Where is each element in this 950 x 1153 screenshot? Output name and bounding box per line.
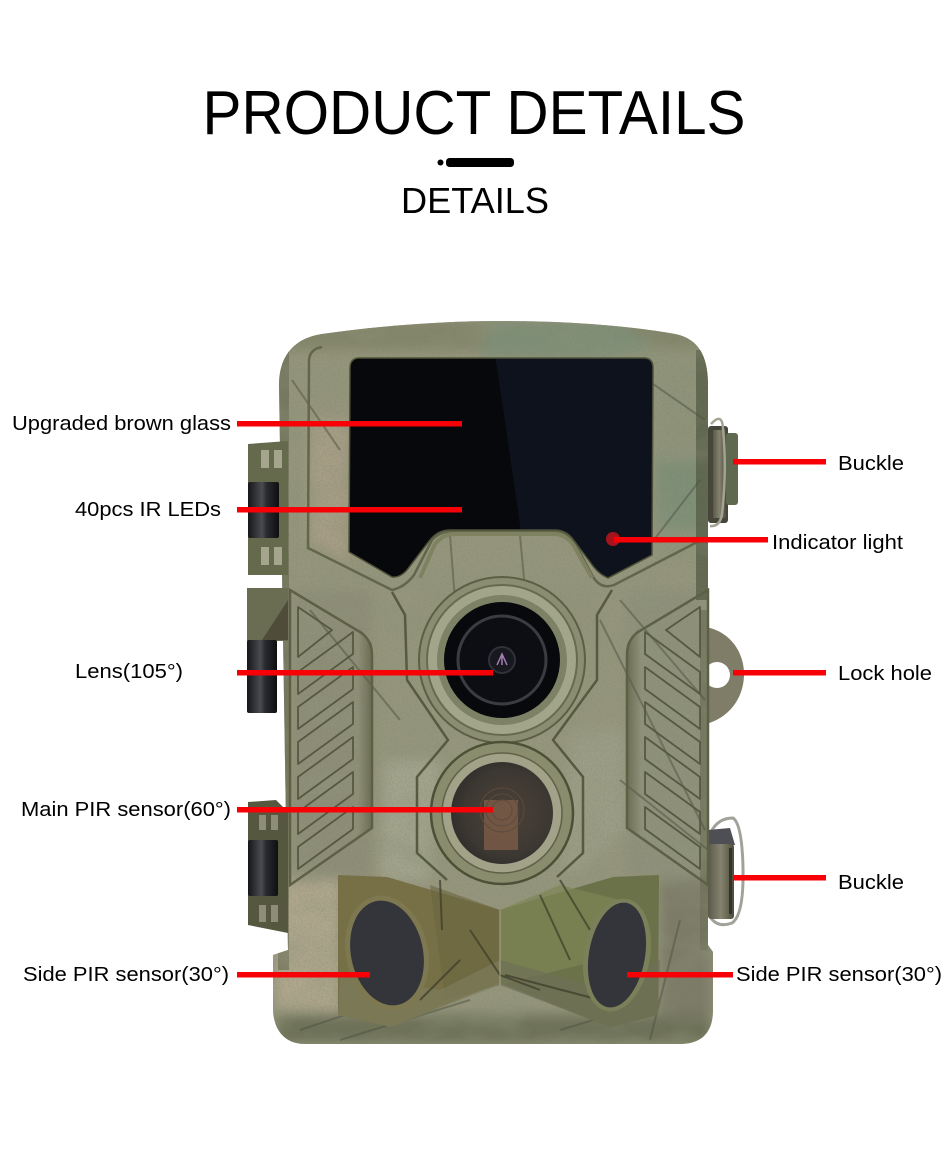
surface grain xyxy=(273,402,623,1010)
right panel xyxy=(627,590,708,885)
side sensor block xyxy=(338,875,660,1027)
camo body base xyxy=(270,315,720,1050)
top buckle xyxy=(708,419,738,526)
callout: Side PIR sensor left: Side PIR sensor(30°) xyxy=(23,964,229,986)
callout: Buckle top xyxy=(733,453,904,475)
callout: Buckle top: Buckle xyxy=(838,453,904,475)
callout: Upgraded brown glass: Upgraded brown glass xyxy=(12,413,231,435)
chevron ridges right xyxy=(645,607,700,869)
callout: 40pcs IR LEDs: 40pcs IR LEDs xyxy=(75,499,221,521)
indicator light xyxy=(606,532,620,546)
subtitle: DETAILS xyxy=(401,180,549,221)
darker body edges xyxy=(278,350,710,970)
camera body xyxy=(270,315,720,1050)
callout: Lock hole xyxy=(733,663,932,685)
glass reflection xyxy=(495,355,657,581)
callout: 40pcs IR LEDs xyxy=(75,499,462,521)
left panel xyxy=(290,590,372,885)
lock hole tab xyxy=(704,627,744,724)
callout: Lens: Lens(105°) xyxy=(75,661,183,683)
callout: Buckle bottom xyxy=(733,872,904,894)
upper bezel outline xyxy=(308,347,707,590)
title divider xyxy=(438,158,514,167)
title: PRODUCT DETAILS xyxy=(202,79,746,148)
brown glass window xyxy=(345,355,657,581)
callout: Buckle bottom: Buckle xyxy=(838,872,904,894)
callout: Upgraded brown glass xyxy=(12,413,462,435)
lens assembly xyxy=(419,577,585,743)
callout: Main PIR sensor xyxy=(21,799,493,821)
camouflage mottling xyxy=(288,350,708,1038)
left side PIR sensor xyxy=(335,888,439,1018)
chevron ridges left xyxy=(298,607,353,869)
centre ridge above lens xyxy=(420,534,592,578)
bottom buckle xyxy=(708,818,743,925)
callout: Side PIR sensor right: Side PIR sensor(30°) xyxy=(736,964,942,986)
callout: Side PIR sensor left xyxy=(23,964,370,986)
main PIR sensor xyxy=(431,742,573,884)
callout: Side PIR sensor right xyxy=(627,964,942,986)
camouflage tone patches xyxy=(276,320,720,1044)
camouflage branches xyxy=(292,375,708,1040)
callout: Main PIR sensor: Main PIR sensor(60°) xyxy=(21,799,231,821)
central hourglass outline xyxy=(392,590,612,880)
callout: Indicator light: Indicator light xyxy=(772,532,903,554)
callout: Indicator light xyxy=(614,532,903,554)
callout: Lens xyxy=(75,661,493,683)
glass edge xyxy=(349,358,653,578)
left hinges xyxy=(247,441,288,933)
right side PIR sensor xyxy=(575,893,659,1017)
callout: Lock hole: Lock hole xyxy=(838,663,932,685)
